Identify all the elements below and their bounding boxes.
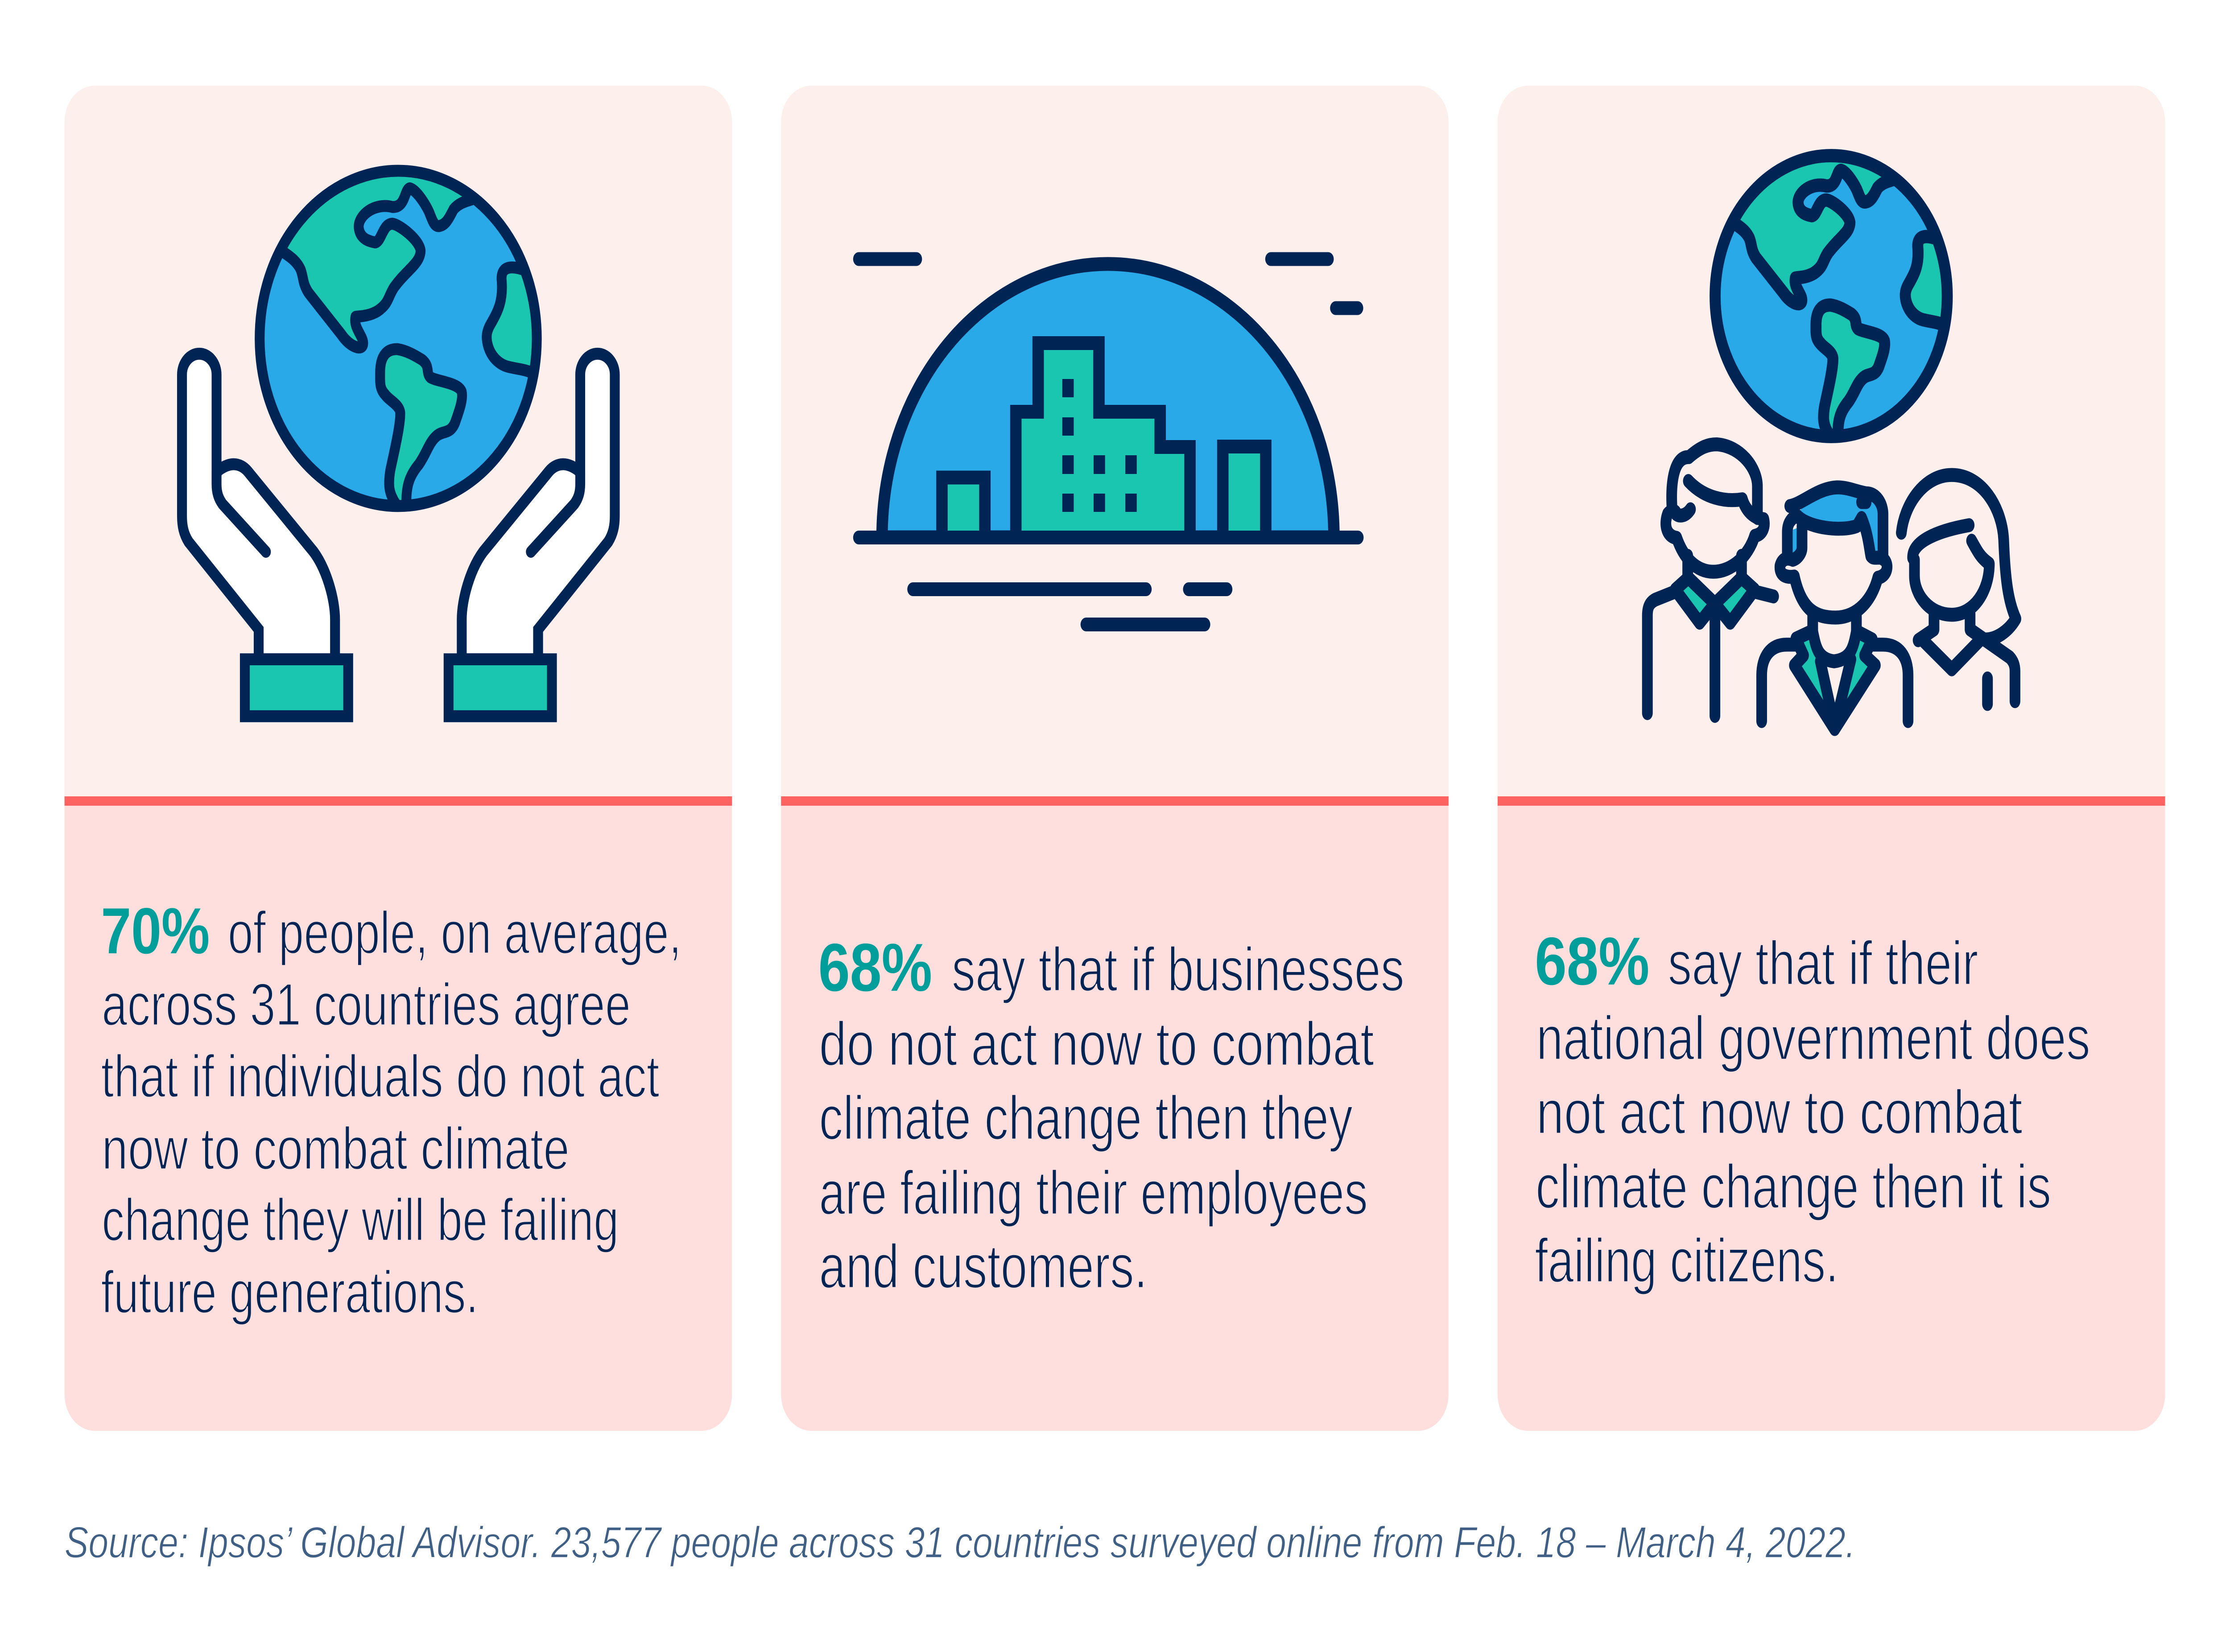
statement: businesses: 68%: [818, 930, 932, 1005]
statement: businesses: say that if businesses: [952, 935, 1404, 1005]
statement: government: say that if their: [1668, 929, 1978, 998]
icon: city under dome: [859, 259, 1358, 624]
divider: businesses: [781, 796, 1449, 806]
panel bottom: government: [1498, 803, 2165, 1431]
man centre: [1762, 487, 1908, 729]
icon: hands holding globe: [182, 171, 615, 716]
statement: individuals: [101, 895, 681, 1326]
panel top: businesses: [781, 86, 1449, 798]
dome: [882, 264, 1334, 537]
divider: government: [1498, 796, 2165, 806]
panel: individuals: [65, 86, 732, 1431]
panel bottom: individuals: [65, 803, 732, 1431]
statement: businesses: are failing their employees: [819, 1159, 1368, 1228]
man left: [1648, 445, 1774, 716]
left hand: [182, 354, 348, 716]
panel top: government: [1498, 86, 2165, 798]
statement: individuals: across 31 countries agree: [102, 972, 631, 1038]
statement: individuals: now to combat climate: [102, 1116, 570, 1182]
statement: individuals: change they will be failing: [102, 1187, 619, 1253]
statement: businesses: climate change then they: [819, 1084, 1353, 1153]
woman: [1901, 475, 2016, 704]
statement: individuals: of people, on average,: [228, 900, 681, 966]
statement: individuals: that if individuals do not act: [101, 1043, 660, 1110]
source note: Source: Ipsos’ Global Advisor. 23,577 people across 31 countries surveyed online from Feb. 18 – March 4, 2022.: [65, 1519, 1855, 1567]
icon: globe above people: [1648, 156, 2016, 729]
panel: government: [1498, 86, 2165, 1431]
ground and cloud dashes: [859, 259, 1358, 624]
statement: businesses: and customers.: [819, 1232, 1148, 1302]
globe: [260, 171, 537, 506]
panel: businesses: [781, 86, 1449, 1431]
right building: [1223, 447, 1266, 537]
statement: government: 68%: [1535, 923, 1649, 999]
statement: government: climate change then it is: [1536, 1153, 2051, 1222]
windows: [1062, 379, 1137, 512]
statement: individuals: 70%: [101, 895, 210, 968]
statement: businesses: [818, 930, 1404, 1302]
statement: businesses: do not act now to combat: [819, 1010, 1374, 1079]
small building: [942, 478, 985, 537]
panel top: individuals: [65, 86, 732, 798]
divider: individuals: [65, 796, 732, 806]
statement: government: not act now to combat: [1536, 1078, 2023, 1147]
main building: [1016, 343, 1190, 537]
statement: government: national government does: [1536, 1004, 2090, 1073]
statement: government: [1535, 923, 2090, 1296]
people: [1648, 445, 2016, 729]
statement: individuals: future generations.: [101, 1259, 479, 1326]
statement: government: failing citizens.: [1535, 1227, 1838, 1296]
globe: [1715, 156, 1947, 437]
right hand: [449, 354, 615, 716]
panel bottom: businesses: [781, 803, 1449, 1431]
